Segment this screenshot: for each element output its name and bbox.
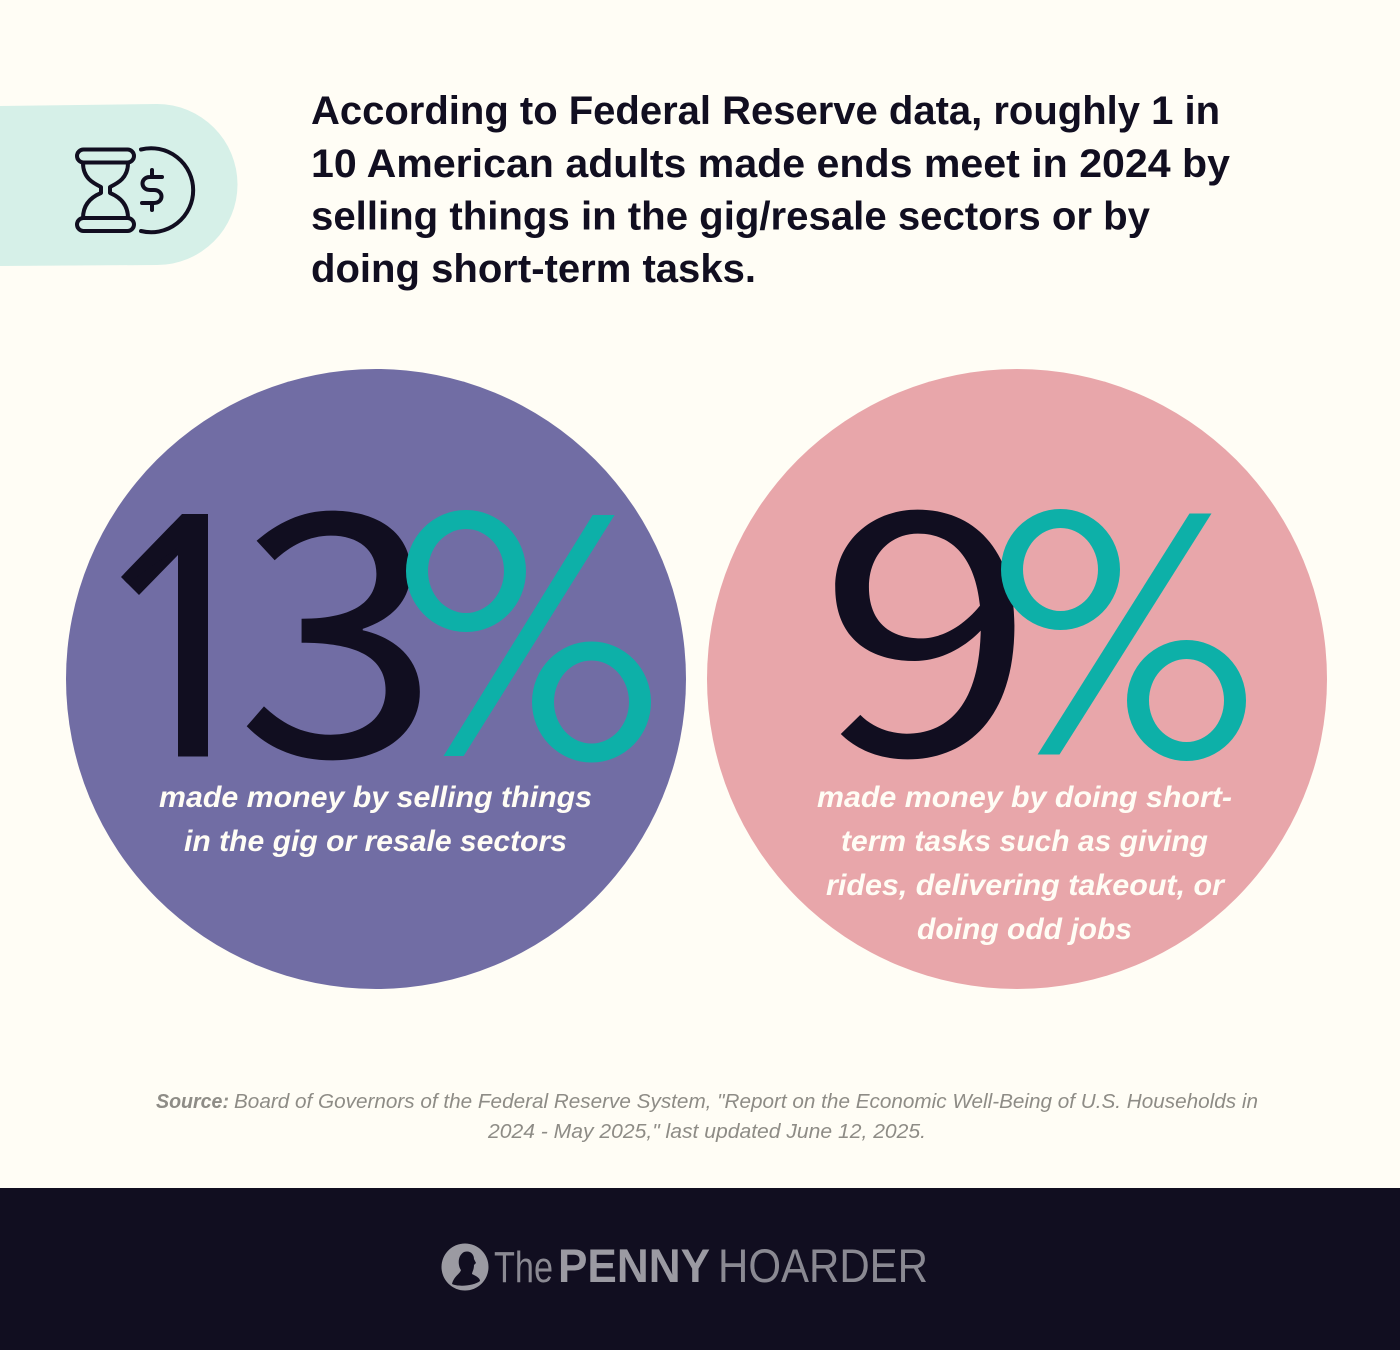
- statistic: 13%: %: [368, 456, 689, 827]
- panel: 13 percent circle: [66, 364, 689, 989]
- wordmark: HOARDER: [718, 1239, 928, 1292]
- icon: dollar coin: [141, 148, 193, 232]
- heading: selling things in the gig/resale sectors or by: [311, 194, 1151, 238]
- caption: made money by doing short-: [817, 781, 1232, 814]
- caption: doing odd jobs: [917, 913, 1132, 946]
- heading: 10 American adults made ends meet in 2024 by: [311, 142, 1231, 186]
- caption: [159, 781, 592, 858]
- icon: hourglass: [77, 150, 134, 231]
- statistic: 13%: 1: [91, 444, 283, 830]
- source note: Source:: [156, 1091, 229, 1113]
- icon badge: hourglass and coin: [0, 104, 238, 266]
- statistic: 13%: 3: [236, 364, 440, 854]
- statistic: 9%: 9: [818, 363, 1036, 853]
- logo: The Penny Hoarder: [442, 1239, 928, 1292]
- source note: [156, 1091, 1258, 1143]
- footer band: [0, 1188, 1400, 1350]
- panel: 9 percent circle: [707, 363, 1327, 989]
- icon: portrait coin: [442, 1244, 488, 1290]
- badge background: [0, 104, 238, 266]
- caption: rides, delivering takeout, or: [826, 869, 1226, 902]
- source note: Board of Governors of the Federal Reserve System, "Report on the Economic Well-Being of U.S. Households in: [234, 1091, 1258, 1113]
- statistic: 9%: %: [963, 455, 1284, 826]
- wordmark: [494, 1239, 928, 1292]
- circle: [66, 369, 686, 989]
- heading: [311, 89, 1231, 291]
- circle: [707, 369, 1327, 989]
- caption: in the gig or resale sectors: [184, 825, 567, 858]
- statistic: 13%: [121, 510, 651, 762]
- caption: [817, 781, 1232, 946]
- statistic: 9%: [835, 509, 1246, 761]
- wordmark: The: [494, 1243, 553, 1292]
- caption: term tasks such as giving: [841, 825, 1208, 858]
- source note: 2024 - May 2025," last updated June 12, 2025.: [487, 1121, 926, 1143]
- heading: According to Federal Reserve data, roughly 1 in: [311, 89, 1220, 133]
- heading: doing short-term tasks.: [311, 247, 756, 291]
- caption: made money by selling things: [159, 781, 592, 814]
- wordmark: PENNY: [558, 1239, 710, 1292]
